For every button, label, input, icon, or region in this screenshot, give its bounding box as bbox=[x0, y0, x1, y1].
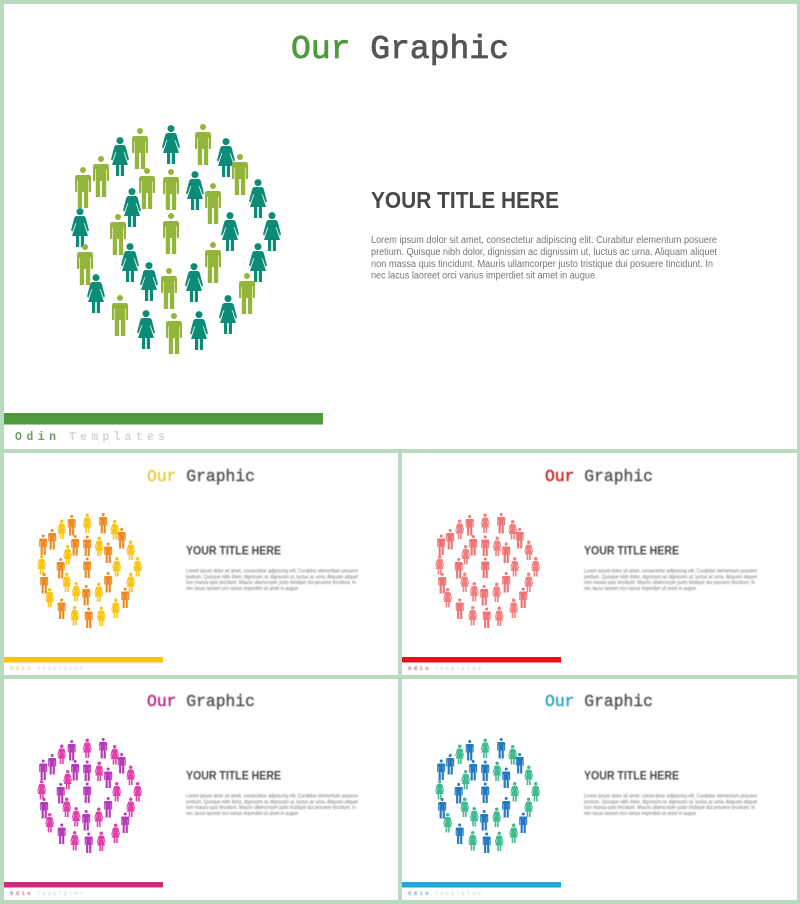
heading: pink: YOUR TITLE HERE bbox=[186, 771, 281, 783]
text block: main: nec lacus laoreet orci varius imperdiet sit amet in augue bbox=[371, 270, 595, 282]
brand: red bbox=[408, 665, 481, 672]
title: main: Our Graphic bbox=[291, 31, 509, 68]
accent bar: blue bbox=[402, 882, 561, 888]
title: red: Our Graphic bbox=[545, 467, 653, 486]
panel: blue slide bbox=[402, 679, 797, 900]
text block: yellow: non massa quis tincidunt. Mauris ullamcorper justo tristique dui posuere tincidunt. In bbox=[186, 580, 356, 586]
accent bar: main bbox=[4, 413, 323, 424]
brand: yellow: Templates bbox=[37, 665, 83, 672]
text block: red: Lorem ipsum dolor sit amet, consectetur adipiscing elit. Curabitur elementum posuere bbox=[584, 568, 757, 574]
brand: main bbox=[15, 431, 165, 444]
brand: blue bbox=[408, 890, 481, 897]
panel: red slide bbox=[402, 453, 797, 675]
heading: yellow: YOUR TITLE HERE bbox=[186, 546, 281, 558]
people circle: yellow bbox=[37, 513, 142, 628]
text block: yellow: Lorem ipsum dolor sit amet, consectetur adipiscing elit. Curabitur elementum posuere bbox=[186, 568, 358, 574]
text block: red bbox=[584, 568, 758, 592]
accent bar: red bbox=[402, 657, 561, 662]
people circle: main bbox=[71, 124, 281, 354]
heading: blue: YOUR TITLE HERE bbox=[584, 771, 679, 783]
title: yellow: Our Graphic bbox=[147, 467, 255, 486]
text block: red: nec lacus laoreet orci varius imperdiet sit amet in augue bbox=[584, 586, 696, 592]
panel: main green slide bbox=[4, 4, 797, 449]
text block: pink bbox=[186, 793, 359, 817]
brand: yellow bbox=[10, 665, 83, 672]
brand: pink: Templates bbox=[37, 890, 83, 897]
panel: pink slide bbox=[4, 679, 398, 900]
text block: pink: Lorem ipsum dolor sit amet, consectetur adipiscing elit. Curabitur elementum posuere bbox=[186, 793, 358, 799]
text block: blue: pretium. Quisque nibh dolor, dignissim ac dignissim ut, luctus ac urna. Aliquam aliquet bbox=[584, 799, 758, 805]
brand: blue: Templates bbox=[435, 890, 481, 897]
text block: yellow bbox=[186, 568, 359, 592]
text block: pink: pretium. Quisque nibh dolor, dignissim ac dignissim ut, luctus ac urna. Aliquam aliquet bbox=[186, 799, 359, 805]
heading: red: YOUR TITLE HERE bbox=[584, 546, 679, 558]
brand: pink bbox=[10, 890, 83, 897]
people circle: red bbox=[435, 513, 540, 628]
text block: blue: Lorem ipsum dolor sit amet, consectetur adipiscing elit. Curabitur elementum posuere bbox=[584, 793, 757, 799]
people circle: pink bbox=[37, 738, 142, 853]
brand: main: Odin bbox=[15, 431, 56, 444]
text block: yellow: pretium. Quisque nibh dolor, dignissim ac dignissim ut, luctus ac urna. Aliquam aliquet bbox=[186, 574, 359, 580]
accent bar: yellow bbox=[4, 657, 163, 662]
text block: pink: nec lacus laoreet orci varius imperdiet sit amet in augue bbox=[186, 811, 298, 817]
text block: red: pretium. Quisque nibh dolor, dignissim ac dignissim ut, luctus ac urna. Aliquam aliquet bbox=[584, 574, 758, 580]
title: pink: Our Graphic bbox=[147, 692, 255, 711]
text block: blue: non massa quis tincidunt. Mauris ullamcorper justo tristique dui posuere tincidunt. In bbox=[584, 805, 755, 811]
title: blue: Our Graphic bbox=[545, 692, 653, 711]
text block: main: Lorem ipsum dolor sit amet, consectetur adipiscing elit. Curabitur elementum posuere bbox=[371, 235, 717, 246]
text block: pink: non massa quis tincidunt. Mauris ullamcorper justo tristique dui posuere tincidunt. In bbox=[186, 805, 356, 811]
brand: yellow: Odin bbox=[10, 665, 30, 672]
text block: main: non massa quis tincidunt. Mauris ullamcorper justo tristique dui posuere tincidunt. In bbox=[371, 259, 713, 270]
brand: blue: Odin bbox=[408, 890, 428, 897]
panel: yellow slide bbox=[4, 453, 398, 675]
people circle: blue bbox=[435, 738, 540, 853]
text block: main: pretium. Quisque nibh dolor, dignissim ac dignissim ut, luctus ac urna. Aliquam aliquet bbox=[371, 247, 717, 258]
brand: main: Templates bbox=[69, 431, 165, 444]
text block: red: non massa quis tincidunt. Mauris ullamcorper justo tristique dui posuere tincidunt. In bbox=[584, 580, 755, 586]
text block: main bbox=[371, 235, 717, 282]
brand: red: Odin bbox=[408, 665, 428, 672]
brand: red: Templates bbox=[435, 665, 481, 672]
text block: blue: nec lacus laoreet orci varius imperdiet sit amet in augue bbox=[584, 811, 696, 817]
accent bar: pink bbox=[4, 882, 163, 888]
heading: main: YOUR TITLE HERE bbox=[371, 187, 559, 213]
text block: blue bbox=[584, 793, 758, 817]
text block: yellow: nec lacus laoreet orci varius imperdiet sit amet in augue bbox=[186, 586, 298, 592]
brand: pink: Odin bbox=[10, 890, 30, 897]
